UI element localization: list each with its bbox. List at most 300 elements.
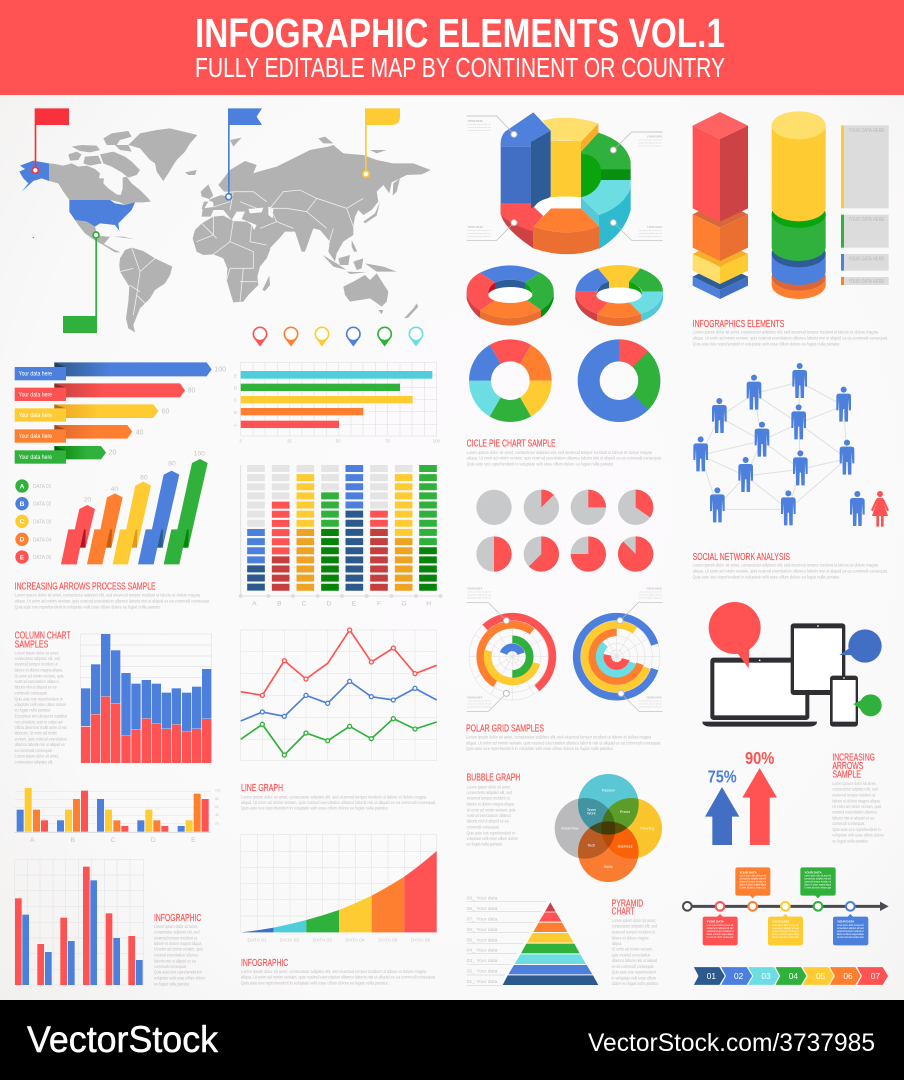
callouts: large donut: consectetur adipisici elit sed: [638, 232, 662, 235]
heading: increasing arrows: INCREASING ARROWS PROCESS SAMPLE: [15, 581, 156, 592]
footer bar: [0, 1000, 904, 1080]
timeline card: blue: labore et dolore magna aliqua: [837, 933, 864, 936]
callouts: polar grids: eiusmod tempor incidunt ut: [638, 705, 662, 708]
ribbon bar chart: 40: [136, 429, 144, 436]
ribbon bar chart: Your data here: [19, 372, 53, 378]
chart: stacked block columns: A: [252, 600, 257, 607]
map: grey continents: [49, 128, 431, 332]
timeline card: orange: Lorem ipsum dolor sit amet elit: [739, 875, 766, 878]
chart: venn bubbles: Tech: [587, 843, 595, 847]
timeline card: red: eiusmod tempor incidunt ut: [707, 930, 734, 933]
legend: data keys: DATA 04: [33, 537, 51, 543]
callouts: polar grids: Lorem ipsum dolor sit amet elit: [638, 591, 662, 594]
text block: infographic left: Lorem ipsum dolor sit amet,: [154, 923, 198, 929]
chart: growth area: DATA 03: [313, 937, 332, 943]
text block: column chart: laboris nisi ut aliquid ex ea: [15, 684, 57, 690]
chart: increasing arrows: 40: [111, 486, 118, 493]
chart: horizontal bars: 25: [287, 438, 292, 443]
timeline card: blue: eiusmod tempor incidunt ut: [837, 930, 864, 933]
legend: data keys: DATA 01: [33, 484, 51, 490]
text block: column chart: non proident, sunt in culpa qui: [15, 719, 62, 724]
heading: pyramid chart: [612, 898, 643, 918]
callouts: polar grids: eiusmod tempor incidunt ut: [467, 705, 491, 708]
ribbon bar chart: Your data here: [19, 455, 53, 461]
chevron step bar: 04: [789, 971, 798, 981]
text block: pyramid chart: Lorem ipsum dolor sit amet,: [612, 917, 656, 923]
heading: column chart: [15, 631, 71, 650]
legend: data keys: [15, 479, 51, 564]
chart: stacked block columns: D: [327, 600, 332, 607]
panel: right column top: [693, 111, 889, 581]
chart: stacked cylinder: [772, 111, 826, 299]
map: inland seas: [248, 207, 273, 218]
legend: data keys: D: [20, 537, 25, 544]
timeline card: green: YOUR DATA: [804, 870, 822, 874]
chart: venn bubbles: Team: [587, 808, 596, 812]
chart: polar grid left: [456, 600, 569, 713]
chart: horizontal bars: 100: [433, 438, 440, 443]
header banner: [0, 0, 904, 95]
chart: flat donut six segments: [469, 339, 552, 422]
ribbon bar chart: 60: [162, 408, 170, 415]
text block: column chart: Excepteur sint obcaecat cupiditat: [15, 713, 68, 718]
text block: social network analysis: [693, 563, 888, 581]
text block: bubble graph: commodi consequat.: [467, 824, 500, 829]
text block: column chart: veniam, quis nostrud exercitation: [15, 736, 67, 741]
text block: infographic left: labore et dolore magna aliqua.: [154, 940, 202, 946]
timeline card: orange: Ut enim ad minim veniam quis: [739, 887, 767, 890]
text block: infographics elements: Quis aute iure reprehenderit in voluptate velit esse cillum dolore eu fugiat nulla pariatur.: [693, 341, 840, 347]
icon: map pin green: [378, 327, 391, 347]
chart: small 3D donut right: [575, 265, 663, 326]
chart: grouped bars: 80: [215, 797, 219, 801]
text block: infographic left: consectetur adipisici elit, sed: [154, 929, 200, 935]
text block: increasing arrows sample: commodi consequat.: [832, 820, 865, 826]
panel: world map with flags and pins: [19, 108, 431, 347]
text block: polar grid: Quis aute iure reprehenderit in voluptate velit esse cillum dolore eu fugiat nulla pariatur.: [466, 746, 614, 752]
timeline card: green: consectetur adipisici elit sed: [804, 878, 832, 881]
text block: increasing arrows sample: eu fugiat nulla pariatur.: [832, 838, 869, 843]
timeline card: green: Lorem ipsum dolor sit amet elit: [804, 875, 831, 878]
chart: horizontal bars: 0: [240, 438, 243, 443]
chart: pyramid: 07_ Your data: [467, 917, 498, 923]
callouts: polar grids: Lorem ipsum dolor sit amet elit: [467, 591, 491, 594]
icon: blue speech bubble: [839, 629, 882, 663]
text block: infographic bottom: Quis aute iure reprehenderit in voluptate velit esse cillum dolore eu fugiat nulla pariatur.: [241, 980, 389, 986]
legend: your data here bars: YOUR DATA HERE: [848, 279, 884, 285]
text block: column chart: Lorem ipsum dolor sit amet,: [15, 650, 59, 655]
chart: grouped bars: D: [151, 837, 156, 844]
ribbon bar chart: 100: [214, 367, 226, 374]
timeline card: blue: Lorem ipsum dolor sit amet elit: [837, 924, 864, 927]
text block: pyramid chart: Ut enim ad minim veniam,: [612, 946, 653, 952]
callouts: polar grids: YOUR DATA: [467, 587, 482, 591]
callouts: polar grids: YOUR DATA: [646, 695, 662, 699]
chart: stacked columns: [81, 634, 211, 763]
chart: stacked block columns: C: [302, 600, 307, 607]
footer logo: VectorStock: [27, 1019, 218, 1060]
text block: polar grid: [466, 735, 661, 752]
chevron step bar: 02: [734, 971, 744, 981]
text block: polar grid: Lorem ipsum dolor sit amet, consectetur adipisici elit, sed eiusmod tempor incidunt ut labore et dolore magna: [466, 735, 652, 741]
text block: column chart: Ut enim ad minim veniam, quis: [15, 673, 64, 678]
chart: grouped bars: [15, 788, 221, 844]
legend: your data here bars: YOUR DATA HERE: [848, 128, 884, 134]
text block: column chart: consectetur adipisici elit, sed: [15, 655, 61, 661]
heading: pyramid chart: PYRAMID: [612, 898, 643, 909]
timeline card: green: [800, 867, 836, 898]
chart: venn bubbles: Passion: [602, 788, 615, 792]
text block: increasing arrows sample: nostrud exercitation ullamco: [832, 809, 877, 815]
chart: grouped bars: 40: [215, 813, 219, 817]
text block: pyramid chart: consectetur adipisici elit, sed: [612, 923, 658, 929]
timeline card: orange: consectetur adipisici elit sed: [739, 878, 767, 881]
text block: line graph: Lorem ipsum dolor sit amet, consectetur adipisici elit, sed eiusmod tempor incidunt ut labore et dolore magna: [241, 794, 427, 800]
ribbon bar chart: 20: [109, 449, 117, 456]
chart: horizontal bars: C: [234, 397, 237, 402]
text block: infographics elements: [693, 330, 888, 347]
text block: infographic left: Ut enim ad minim veniam, quis: [154, 946, 203, 952]
heading: column chart: COLUMN CHART: [15, 631, 71, 642]
callouts: large donut: Lorem ipsum dolor sit amet elit: [467, 123, 491, 126]
chevron step bar: 05: [816, 971, 826, 981]
text block: pyramid chart: eiusmod tempor incidunt ut: [612, 929, 655, 934]
text block: circle pie chart: [467, 450, 662, 467]
chart: pyramid: 02_ Your data: [467, 969, 498, 975]
text block: pyramid chart: ex ea commodi consequat.: [612, 963, 654, 969]
timeline card: orange: eiusmod tempor incidunt ut: [739, 881, 766, 884]
text block: bubble graph: nostrud exercitation ullamco: [467, 812, 512, 818]
chart: horizontal bars: B: [234, 410, 237, 415]
text block: bubble graph: eu fugiat nulla pariatur.: [467, 841, 503, 847]
chart: growth area: [241, 834, 437, 943]
text block: bubble graph: laboris nisi ut aliquid ex ea: [467, 818, 509, 824]
heading: circle pie chart: CICLE PIE CHART SAMPLE: [467, 439, 556, 450]
text block: infographic bottom: [241, 969, 436, 986]
chart: pyramid: 05_ Your data: [467, 937, 498, 943]
timeline card: yellow: Ut enim ad minim veniam quis: [772, 936, 799, 939]
heading: increasing arrows sample: INCREASING: [832, 752, 875, 763]
icon: tablet: [791, 623, 845, 695]
heading: polar grid: POLAR GRID SAMPLES: [466, 723, 544, 734]
legend: data keys: E: [20, 554, 25, 561]
chart: pyramid: 06_ Your data: [467, 927, 498, 933]
text block: infographic bottom: Lorem ipsum dolor sit amet, consectetur adipisici elit, sed eiusmod tempor incidunt ut labore et dolore magna: [241, 969, 427, 975]
timeline card: orange: YOUR DATA: [739, 870, 757, 874]
panel: donut charts: [467, 112, 663, 467]
text block: increasing arrows sample: voluptate velit esse cillum dolore: [832, 832, 884, 838]
chart: large 3D donut: [501, 112, 631, 254]
chart: growth area: DATA 05: [378, 937, 398, 943]
footer url: VectorStock.com/3737985: [588, 1029, 875, 1057]
timeline card: red: Ut enim ad minim veniam quis: [707, 936, 734, 939]
text block: social network analysis: Quis aute iure reprehenderit in voluptate velit esse cillum dolore eu fugiat nulla pariatur.: [693, 575, 840, 581]
text block: bubble graph: Ut enim ad minim veniam, quis: [467, 807, 516, 812]
flag: yellow: [363, 108, 400, 177]
text block: bubble graph: eiusmod tempor incidunt ut: [467, 795, 510, 801]
text block: infographic left: laboris nisi ut aliquid ex ea: [154, 958, 196, 963]
arrow: red 90%: 90%: [745, 748, 774, 768]
chart: horizontal bars: [234, 362, 440, 443]
chart: venn bubbles: Planning: [640, 826, 654, 830]
chart: flat donut three segments: [576, 338, 662, 424]
text block: increasing arrows sample: [832, 780, 884, 843]
callouts: large donut: Lorem ipsum dolor sit amet elit: [638, 229, 662, 232]
chart: increasing arrows: 60: [140, 475, 148, 482]
heading: pyramid chart: CHART: [612, 907, 635, 918]
callouts: large donut: [467, 116, 663, 240]
timeline card: yellow: labore et dolore magna aliqua: [772, 933, 799, 936]
text block: pyramid chart: Quis aute iure reprehenderit: [612, 969, 657, 975]
icon: map pin yellow: [315, 327, 329, 347]
callouts: large donut: consectetur adipisici elit sed: [467, 232, 491, 235]
panel: bubble graph and pyramid: [467, 773, 662, 986]
callouts: polar grids: consectetur adipisici elit sed: [638, 702, 662, 705]
icon: red speech bubble: [709, 602, 761, 668]
callouts: polar grids: eiusmod tempor incidunt ut: [467, 597, 491, 600]
timeline card: red: [703, 914, 738, 945]
text block: infographic left: nostrud exercitation ullamco: [154, 952, 199, 958]
chart: growth area: DATA 02: [280, 937, 299, 943]
text block: column chart: Quis aute iure reprehenderit in: [15, 696, 63, 701]
text block: circle pie chart: Lorem ipsum dolor sit amet, consectetur adipisici elit, sed eiusmod tempor incidunt ut labore et dolore magna: [467, 450, 652, 456]
chart: stacked block columns: F: [377, 600, 381, 607]
timeline card: green: Ut enim ad minim veniam quis: [804, 887, 832, 890]
icon: woman: [871, 491, 889, 527]
timeline card: red: labore et dolore magna aliqua: [707, 933, 734, 936]
chart: polar grid right: [566, 606, 667, 707]
timeline card: blue: consectetur adipisici elit sed: [837, 927, 864, 930]
legend: your data here bars: YOUR DATA HERE: [848, 217, 884, 223]
callouts: polar grids: eiusmod tempor incidunt ut: [638, 597, 662, 600]
chevron step bar: 01: [707, 971, 716, 981]
timeline card: red: consectetur adipisici elit sed: [707, 927, 734, 930]
callouts: large donut: eiusmod tempor incidunt ut: [638, 144, 662, 147]
text block: pyramid chart: dolore eu fugiat nulla pariatur.: [612, 980, 659, 986]
chart: increasing arrows: 20: [84, 497, 91, 504]
chart: stacked block columns: [239, 465, 443, 607]
heading: increasing arrows sample: [832, 752, 875, 780]
ribbon bar chart: 80: [188, 388, 196, 395]
text block: polar grid: aliqua. Ut enim ad minim veniam, quis nostrud exercitation ullamco laboris nisi ut aliquid ex ea commodi consequat.: [466, 740, 661, 746]
text block: column chart: eu fugiat nulla pariatur.: [15, 707, 51, 713]
chart: stacked block columns: E: [352, 600, 357, 607]
text block: column chart: voluptate velit esse cillum dolore: [15, 701, 67, 707]
timeline card: yellow: [768, 914, 803, 945]
chart: grouped bars: 60: [215, 805, 219, 809]
text block: column chart: eiusmod tempor incidunt ut: [15, 661, 58, 667]
ribbon bar chart: [15, 362, 226, 464]
text block: column chart: ea commodi consequat.: [15, 747, 53, 753]
callouts: polar grids: YOUR DATA: [467, 695, 482, 699]
text block: column chart: ullamco laboris nisi ut aliquid ex: [15, 741, 66, 747]
timeline card: green: eiusmod tempor incidunt ut: [804, 881, 831, 884]
legend: your data here bars: [841, 125, 889, 285]
heading: infographic left: INFOGRAPHIC: [154, 913, 201, 924]
chart: horizontal bars: E: [234, 373, 237, 378]
callouts: polar grids: Lorem ipsum dolor sit amet elit: [467, 699, 491, 702]
text block: increasing arrows sample: Quis aute iure reprehenderit in: [832, 826, 881, 832]
callouts: large donut: eiusmod tempor incidunt ut: [467, 235, 491, 238]
callouts: large donut: eiusmod tempor incidunt ut: [467, 129, 491, 132]
text block: increasing arrows: [15, 593, 210, 611]
text block: infographic left: commodi consequat.: [154, 963, 187, 969]
text block: line graph: aliqua. Ut enim ad minim veniam, quis nostrud exercitation ullamco laboris nisi ut aliquid ex ea commodi consequat.: [241, 800, 436, 806]
timeline card: blue: YOUR DATA: [837, 920, 855, 924]
chart: increasing arrows: 100: [194, 451, 205, 458]
icon: man: [850, 491, 865, 526]
icon: laptop: [702, 658, 817, 727]
panel: right column bottom: [683, 602, 889, 985]
chart: increasing arrows: 80: [168, 461, 176, 468]
text block: infographic bottom: aliqua. Ut enim ad minim veniam, quis nostrud exercitation ullamco laboris nisi ut aliquid ex ea commodi consequat.: [241, 975, 436, 981]
chart: venn bubbles: Prices: [620, 810, 630, 814]
timeline card: green: labore et dolore magna aliqua: [804, 884, 832, 887]
chevron step bar: 06: [843, 971, 853, 981]
arrow: blue 75%: 75%: [708, 767, 737, 787]
callouts: large donut: Lorem ipsum dolor sit amet elit: [638, 138, 662, 141]
timeline card: orange: labore et dolore magna aliqua: [739, 884, 767, 887]
heading: increasing arrows sample: SAMPLE: [832, 769, 861, 780]
chart: pyramid: [467, 896, 598, 986]
chart: grouped bars: 20: [215, 821, 219, 825]
legend: data keys: DATA 03: [33, 519, 51, 525]
text block: increasing arrows sample: labore et dolore magna aliqua.: [832, 798, 881, 803]
text block: column chart: laborum. Ut enim ad minim: [15, 730, 58, 736]
heading: infographics elements: INFOGRAPHICS ELEMENTS: [693, 319, 784, 330]
heading: social network analysis: SOCIAL NETWORK ANALYSIS: [693, 552, 790, 563]
text block: pyramid chart: labore et dolore magna: [612, 935, 649, 940]
text block: increasing arrows sample: eiusmod tempor incidunt ut: [832, 792, 876, 797]
text block: infographic left: voluptate velit esse cillum dolore: [154, 975, 206, 981]
text block: column chart: Lorem ipsum dolor sit amet,: [15, 753, 59, 759]
legend: data keys: C: [20, 519, 25, 526]
legend: data keys: DATA 02: [33, 502, 51, 508]
ribbon bar chart: Your data here: [19, 392, 53, 398]
text block: infographic left: eu fugiat nulla pariatur.: [154, 981, 190, 986]
text block: infographic left: eiusmod tempor incidunt ut: [154, 935, 198, 940]
text block: bubble graph: Lorem ipsum dolor sit amet,: [467, 784, 511, 789]
callouts: polar grids: YOUR DATA: [646, 587, 662, 591]
text block: pyramid chart: quis nostrud exercitation: [612, 952, 651, 957]
text block: pyramid chart: in voluptate velit esse cillum: [612, 975, 656, 980]
chart: pyramid: 08_ Your data: [467, 906, 498, 912]
ribbon bar chart: Your data here: [19, 434, 53, 440]
text block: line graph: [241, 794, 436, 812]
chart: horizontal bars: D: [234, 385, 237, 390]
chevron step bar: 07: [871, 971, 880, 981]
callouts: large donut: eiusmod tempor incidunt ut: [638, 235, 662, 238]
callouts: large donut: YOUR DATA: [647, 225, 662, 229]
chevron step bar: 03: [761, 971, 771, 981]
text block: column chart: consectetur adipisici elit,: [15, 759, 53, 764]
chart: pyramid: 03_ Your data: [467, 958, 498, 964]
icon: green speech bubble: [853, 694, 882, 716]
chart: progress pies: [476, 490, 653, 572]
chart: grouped bars: E: [191, 837, 196, 844]
chart: growth area: DATA 04: [345, 937, 365, 943]
chart: venn bubbles: Work: [587, 811, 596, 815]
heading: column chart: SAMPLES: [15, 639, 48, 650]
icon: map pin blue: [347, 327, 360, 347]
text block: bubble graph: labore et dolore magna aliqua.: [467, 801, 515, 807]
text block: column chart: officia deserunt mollit anim id est: [15, 724, 67, 730]
callouts: large donut: consectetur adipisici elit sed: [467, 126, 491, 129]
text block: column chart: commodi consequat.: [15, 690, 48, 695]
text block: increasing arrows sample: consectetur adipisici elit, sed: [832, 786, 878, 792]
map: country borders: [120, 190, 363, 315]
timeline card: orange: [735, 867, 770, 898]
chart: small 3D donut left: [467, 265, 554, 326]
chart: venn bubbles: [555, 774, 662, 882]
chart: venn bubbles: Skills: [604, 865, 613, 869]
legend: data keys: DATA 05: [33, 555, 51, 561]
chart: grouped bars: C: [111, 837, 116, 844]
panel: charts row two: [15, 362, 443, 611]
text block: pyramid chart: ullamco laboris nisi ut aliquid: [612, 957, 658, 963]
chart: stacked block columns: H: [426, 600, 431, 607]
text block: circle pie chart: Quis aute iure reprehenderit in voluptate velit esse cillum dolore eu fugiat nulla pariatur.: [467, 461, 614, 467]
chart: pyramid: 04_ Your data: [467, 948, 498, 954]
chart: line graph: [241, 628, 437, 761]
chart: horizontal bars: 75: [385, 438, 390, 443]
text block: pyramid chart: [612, 917, 659, 986]
timeline card: red: YOUR DATA: [707, 920, 725, 924]
ribbon bar chart: Your data here: [19, 413, 53, 419]
callouts: polar grids: Lorem ipsum dolor sit amet elit: [638, 699, 662, 702]
timeline card: blue: [833, 914, 868, 945]
callouts: large donut: Lorem ipsum dolor sit amet elit: [467, 229, 491, 232]
timeline card: yellow: Lorem ipsum dolor sit amet elit: [772, 924, 799, 927]
chart: paired bars: [15, 859, 143, 985]
chart: horizontal bars: 50: [336, 438, 341, 443]
legend: data keys: B: [20, 501, 25, 508]
text block: column chart: nostrud exercitation ullamco: [15, 678, 60, 684]
text block: bubble graph: consectetur adipisici elit, sed: [467, 789, 513, 795]
flag: red: [32, 108, 69, 173]
chart: pyramid: 01_ Your data: [467, 979, 498, 985]
callouts: large donut: consectetur adipisici elit sed: [638, 141, 662, 144]
callouts: polar grids: [467, 587, 663, 711]
heading: line graph: LINE GRAPH: [241, 783, 283, 794]
callouts: polar grids: consectetur adipisici elit sed: [467, 702, 492, 705]
chart: pyramid: 09_ Your data: [467, 896, 498, 902]
text block: increasing arrows: aliqua. Ut enim ad minim veniam, quis nostrud exercitation ullamco laboris nisi ut aliquid ex ea commodi consequat.: [15, 599, 210, 605]
callouts: large donut: YOUR DATA: [467, 225, 483, 229]
callouts: large donut: YOUR DATA: [467, 119, 483, 123]
chart: stacked block columns: G: [401, 600, 407, 607]
chevron step bar: [693, 967, 889, 985]
chart: horizontal bars: A: [234, 422, 237, 427]
icon: map pin cyan: [409, 327, 423, 347]
heading: bubble graph: BUBBLE GRAPH: [467, 773, 520, 784]
text block: line graph: Quis aute iure reprehenderit in voluptate velit esse cillum dolore eu fugiat nulla pariatur.: [241, 806, 389, 812]
text block: bubble graph: [467, 784, 519, 847]
timeline card: yellow: eiusmod tempor incidunt ut: [772, 930, 799, 933]
timeline card: red: Lorem ipsum dolor sit amet elit: [707, 924, 734, 927]
callouts: large donut: YOUR DATA: [647, 134, 662, 138]
arrow: red 90%: [742, 748, 777, 845]
chart: growth area: DATA 06: [411, 937, 430, 943]
text block: circle pie chart: aliqua. Ut enim ad minim veniam, quis nostrud exercitation ullamco laboris nisi ut aliquid ex ea commodi consequat.: [467, 456, 662, 462]
text block: column chart: [15, 650, 68, 764]
subtitle: FULLY EDITABLE MAP BY CONTINENT OR COUNTRY: [195, 52, 725, 83]
flag: green: [63, 232, 99, 333]
panel: pies and polar grids: [456, 490, 667, 752]
text block: infographic left: [154, 923, 206, 986]
chart: venn bubbles: Business: [618, 844, 633, 848]
title: INFOGRAPHIC ELEMENTS VOL.1: [195, 10, 725, 56]
